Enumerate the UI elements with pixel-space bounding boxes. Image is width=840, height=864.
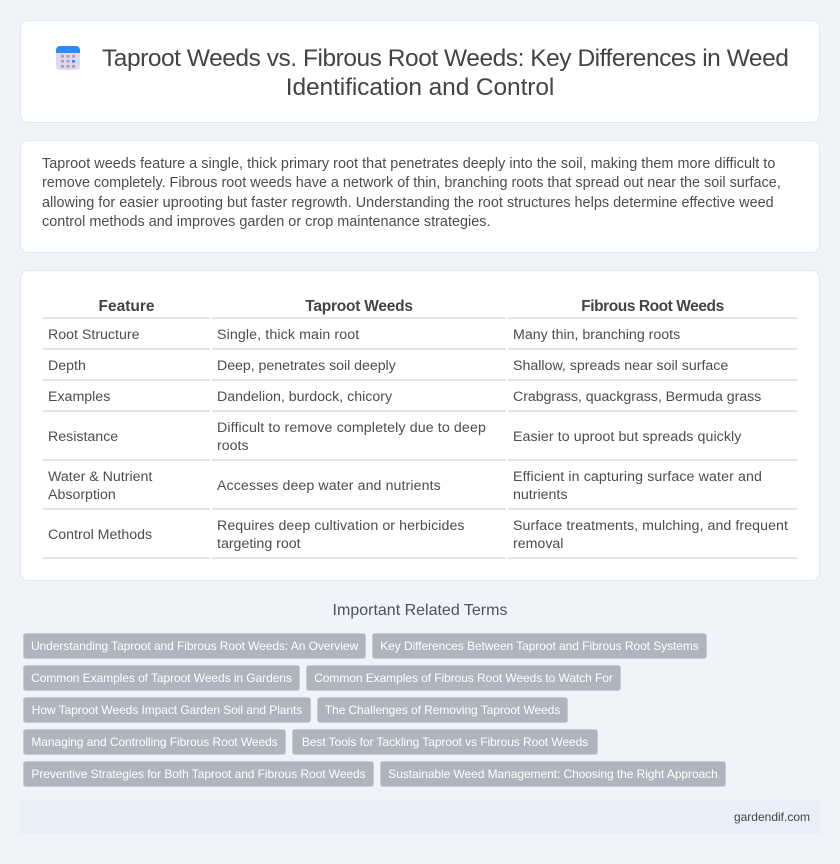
tag list: related terms: Common Examples of Taproot Weeds in Gardens	[31, 671, 292, 685]
table row: control methods	[48, 518, 788, 552]
text block: introduction: remove completely. Fibrous root weeds have a network of thin, branching roots that spread out near the soil surface,	[42, 175, 781, 191]
panel: comparison table	[20, 270, 820, 581]
table row: examples	[48, 389, 761, 405]
table header row: Taproot Weeds	[305, 298, 413, 315]
table row: depth: Depth	[48, 358, 86, 374]
text block: introduction	[42, 156, 781, 230]
table row: control methods: Surface treatments, mulching, and frequent	[513, 518, 788, 534]
table header row: Fibrous Root Weeds	[581, 298, 724, 315]
table row: root structure	[48, 327, 680, 343]
table row: water and nutrient absorption: Absorption	[48, 487, 116, 503]
table row: resistance	[48, 420, 742, 454]
table row: root structure: Many thin, branching roots	[513, 327, 680, 343]
text block: introduction: control methods and improves garden or crop maintenance strategies.	[42, 214, 490, 230]
table header row: Feature	[98, 298, 154, 315]
tag list: related terms: Best Tools for Tackling Taproot vs Fibrous Root Weeds	[302, 735, 588, 749]
table row: examples: Dandelion, burdock, chicory	[217, 389, 392, 405]
heading: important related terms: Important Related Terms	[333, 602, 507, 619]
table row: water and nutrient absorption	[48, 469, 762, 503]
text block: introduction: Taproot weeds feature a single, thick primary root that penetrates deeply into the soil, making them more difficult to	[42, 156, 775, 172]
tag list: related terms: Sustainable Weed Management: Choosing the Right Approach	[388, 767, 718, 781]
tag list: related terms: Preventive Strategies for Both Taproot and Fibrous Root Weeds	[31, 767, 366, 781]
table row: resistance: Easier to uproot but spreads quickly	[513, 429, 741, 445]
table row: resistance: Difficult to remove completely due to deep	[217, 420, 486, 436]
footer bar	[20, 800, 820, 834]
table row: water and nutrient absorption: Efficient in capturing surface water and	[513, 469, 762, 485]
table row: depth: Shallow, spreads near soil surface	[513, 358, 728, 374]
table row: resistance: roots	[217, 438, 249, 454]
footer source text: gardendif.com	[734, 810, 810, 824]
panel: introduction	[20, 140, 820, 253]
text block: introduction: allowing for easier uprooting but faster regrowth. Understanding the root structures helps determine effective weed	[42, 195, 774, 211]
table row: examples: Examples	[48, 389, 110, 405]
tag list: related terms: Managing and Controlling Fibrous Root Weeds	[31, 735, 278, 749]
table row: control methods: targeting root	[217, 536, 301, 552]
icon: calendar	[56, 46, 80, 70]
title	[102, 45, 788, 101]
tag list: related terms: How Taproot Weeds Impact Garden Soil and Plants	[32, 703, 302, 717]
table row: depth	[48, 358, 728, 374]
tag list: related terms: Common Examples of Fibrous Root Weeds to Watch For	[314, 671, 613, 685]
table row: control methods: removal	[513, 536, 563, 552]
title: Taproot Weeds vs. Fibrous Root Weeds: Key Differences in Weed	[102, 45, 788, 72]
table row: control methods: Control Methods	[48, 527, 152, 543]
table header row	[98, 298, 724, 315]
table row: examples: Crabgrass, quackgrass, Bermuda grass	[513, 389, 761, 405]
tag list: related terms	[23, 633, 726, 787]
table row: root structure: Root Structure	[48, 327, 139, 343]
table row: control methods: Requires deep cultivation or herbicides	[217, 518, 465, 534]
table row: water and nutrient absorption: Water & Nutrient	[48, 469, 152, 485]
tag list: related terms: Understanding Taproot and Fibrous Root Weeds: An Overview	[31, 639, 358, 653]
table row: root structure: Single, thick main root	[217, 327, 359, 343]
title: Identification and Control	[286, 74, 554, 101]
table row: resistance: Resistance	[48, 429, 118, 445]
tag list: related terms: The Challenges of Removing Taproot Weeds	[325, 703, 560, 717]
table row: water and nutrient absorption: Accesses deep water and nutrients	[217, 478, 441, 494]
panel: title header	[20, 20, 820, 123]
table row: water and nutrient absorption: nutrients	[513, 487, 567, 503]
tag list: related terms: Key Differences Between Taproot and Fibrous Root Systems	[380, 639, 699, 653]
table row: depth: Deep, penetrates soil deeply	[217, 358, 396, 374]
